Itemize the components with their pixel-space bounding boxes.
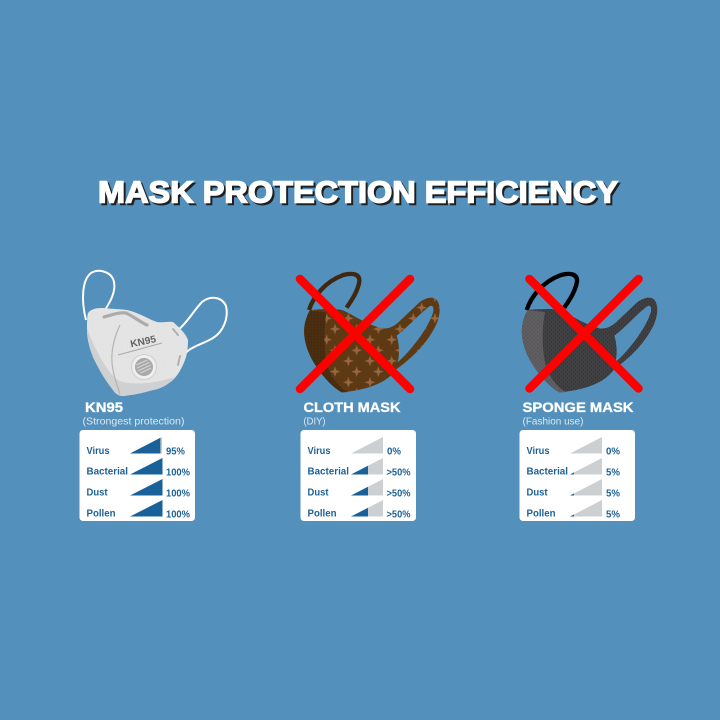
row: bacterial 5% [526,458,620,478]
icon: KN95 mask [83,271,227,396]
row: bacterial 100%: Bacterial [86,466,128,478]
row: pollen >50%: Pollen [308,508,336,520]
row: dust >50% [308,479,411,500]
icon: cloth mask crossed out [300,274,440,392]
panel: cloth mask [300,274,440,521]
row: virus 95%: 95% [166,446,185,458]
row: virus 0% [308,437,401,458]
row: virus 0%: 0% [387,446,401,458]
card: cloth mask ratings [300,430,416,521]
row: dust 5%: Dust [526,488,548,498]
row: bacterial 5%: 5% [606,468,620,478]
row: dust >50%: Dust [308,488,329,498]
row: pollen 5%: Pollen [526,508,556,520]
row: bacterial >50%: >50% [386,468,411,478]
row: bacterial 100%: 100% [166,468,190,478]
subheading: fashion use: (Fashion use) [522,416,584,428]
row: pollen >50%: >50% [386,510,411,520]
row: virus 95%: Virus [86,446,110,457]
panel: sponge mask [520,274,657,521]
title: MASK PROTECTION EFFICIENCY [100,178,620,212]
row: dust 5% [526,479,620,500]
row: pollen 5%: 5% [606,510,620,520]
icon: KN95 mask: KN95 [129,334,158,350]
subheading: strongest protection: (Strongest protection) [82,416,184,428]
row: dust 100%: Dust [86,488,108,498]
heading: KN95: KN95 [85,399,123,415]
icon: sponge mask crossed out [522,274,657,392]
row: virus 0%: Virus [308,446,331,457]
row: bacterial 100% [86,458,190,478]
subheading: DIY: (DIY) [304,416,326,428]
row: pollen 100% [86,500,190,520]
card: sponge mask ratings [520,430,635,521]
row: dust >50%: >50% [386,488,411,500]
row: virus 0%: 0% [606,446,620,458]
row: pollen 5% [526,500,620,520]
row: virus 0%: Virus [526,446,550,457]
row: dust 100% [86,479,190,500]
row: bacterial >50% [308,458,411,478]
title: MASK PROTECTION EFFICIENCY [98,176,618,210]
card: KN95 ratings [80,430,195,521]
row: dust 5%: 5% [606,488,620,500]
row: pollen 100%: 100% [166,510,190,520]
row: bacterial 5%: Bacterial [526,466,568,478]
row: pollen 100%: Pollen [86,508,116,520]
heading: cloth mask: CLOTH MASK [304,399,400,415]
panel: KN95 [80,271,227,521]
heading: sponge mask: SPONGE MASK [522,399,634,415]
row: bacterial >50%: Bacterial [308,466,349,478]
row: dust 100%: 100% [166,488,190,500]
row: pollen >50% [308,500,411,520]
row: virus 95% [86,437,185,458]
row: virus 0% [526,437,620,458]
